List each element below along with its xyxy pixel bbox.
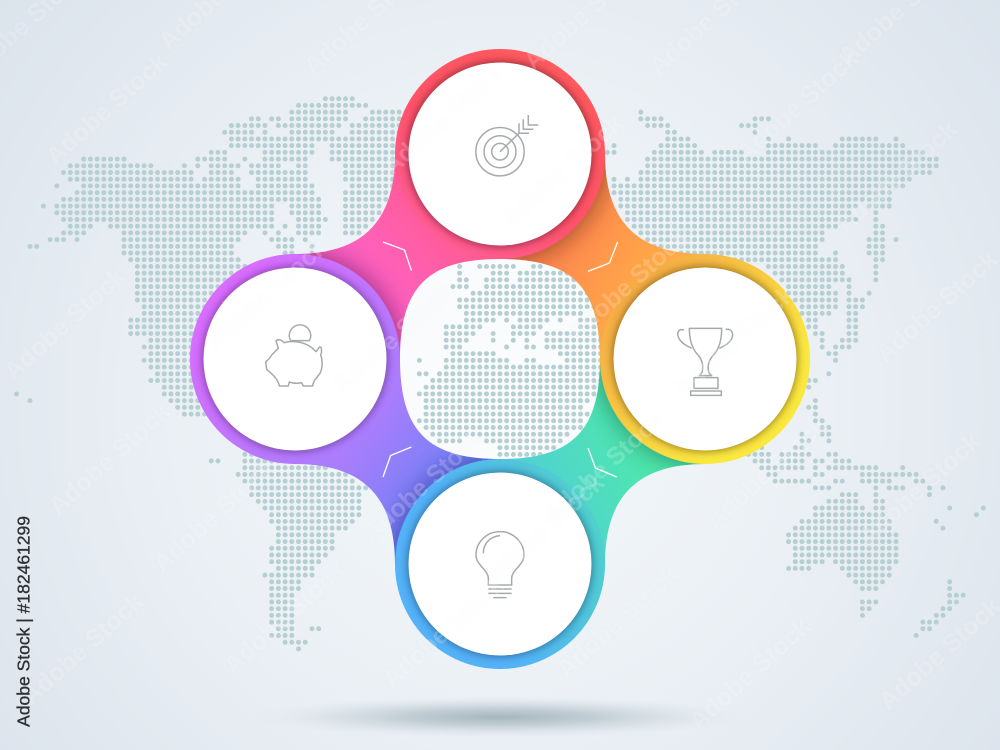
segment: violet connector xyxy=(295,359,500,564)
stock watermarks: Adobe Stock xyxy=(701,411,833,535)
stock watermarks: Adobe Stock xyxy=(732,44,864,168)
node: bottom light bulb circle xyxy=(395,459,605,669)
segment: green connector xyxy=(500,359,705,564)
shadow: right ring on green xyxy=(594,362,701,471)
stock watermarks: Adobe Stock xyxy=(201,233,333,357)
ring: red xyxy=(395,49,605,259)
segment: orange connector xyxy=(500,154,705,359)
stock watermarks: Adobe Stock xyxy=(378,57,510,181)
white disc: left xyxy=(204,268,386,450)
icon: trophy xyxy=(678,328,733,395)
stock watermarks: Adobe Stock xyxy=(497,109,629,233)
stock watermarks: Adobe Stock xyxy=(538,405,670,529)
node: left piggy bank circle xyxy=(190,254,400,464)
stock watermarks: Adobe Stock xyxy=(854,427,986,551)
stock watermarks: Adobe Stock xyxy=(17,587,149,711)
dotted world map xyxy=(17,99,983,649)
arrow: chevron bottom left xyxy=(383,447,411,477)
shadow: left ring on pink xyxy=(298,246,407,356)
ring: purple xyxy=(190,254,400,464)
segment: pink connector xyxy=(295,154,500,359)
stock watermarks: Adobe Stock xyxy=(478,468,610,592)
stock watermarks: Adobe Stock xyxy=(44,397,176,521)
stock watermarks: Adobe Stock xyxy=(41,47,173,171)
stock watermarks: Adobe Stock xyxy=(358,423,490,547)
stock watermarks: Adobe Stock xyxy=(0,262,131,386)
stock watermarks: Adobe Stock xyxy=(831,115,963,239)
stock watermarks: Adobe Stock xyxy=(148,454,280,578)
icon: light bulb xyxy=(476,532,524,598)
white disc: bottom xyxy=(408,472,592,656)
node: right trophy circle xyxy=(600,254,810,464)
stock watermarks: Adobe Stock xyxy=(684,612,816,736)
white disc: top xyxy=(408,62,592,246)
diagram: four linked circles xyxy=(189,48,811,670)
stock watermarks: Adobe Stock xyxy=(552,560,684,684)
icon: piggy bank with coin xyxy=(266,325,322,386)
stock watermarks: Adobe Stock xyxy=(219,556,351,680)
arrow: chevron top right xyxy=(588,242,618,271)
floor shadow xyxy=(254,696,744,738)
stock id label: Adobe Stock | #182461299 xyxy=(14,516,34,727)
stock watermarks: Adobe Stock xyxy=(668,280,800,404)
shadow: top ring on orange xyxy=(503,158,613,266)
icon: target with arrow xyxy=(476,115,538,176)
centre hole highlight xyxy=(400,259,600,459)
white disc: right xyxy=(614,268,796,450)
node: top target circle xyxy=(395,49,605,259)
shadow: bottom ring on violet xyxy=(388,454,495,560)
ring: yellow xyxy=(600,254,810,464)
arrow: chevron bottom right xyxy=(588,448,617,477)
stock watermarks: Adobe Stock xyxy=(378,570,510,694)
ring: blue xyxy=(395,459,605,669)
stock watermarks: Adobe Stock xyxy=(871,245,1000,369)
arrow: chevron top left xyxy=(383,242,411,271)
stock watermarks: Adobe Stock xyxy=(328,276,460,400)
stock watermarks: Adobe Stock xyxy=(562,223,694,347)
